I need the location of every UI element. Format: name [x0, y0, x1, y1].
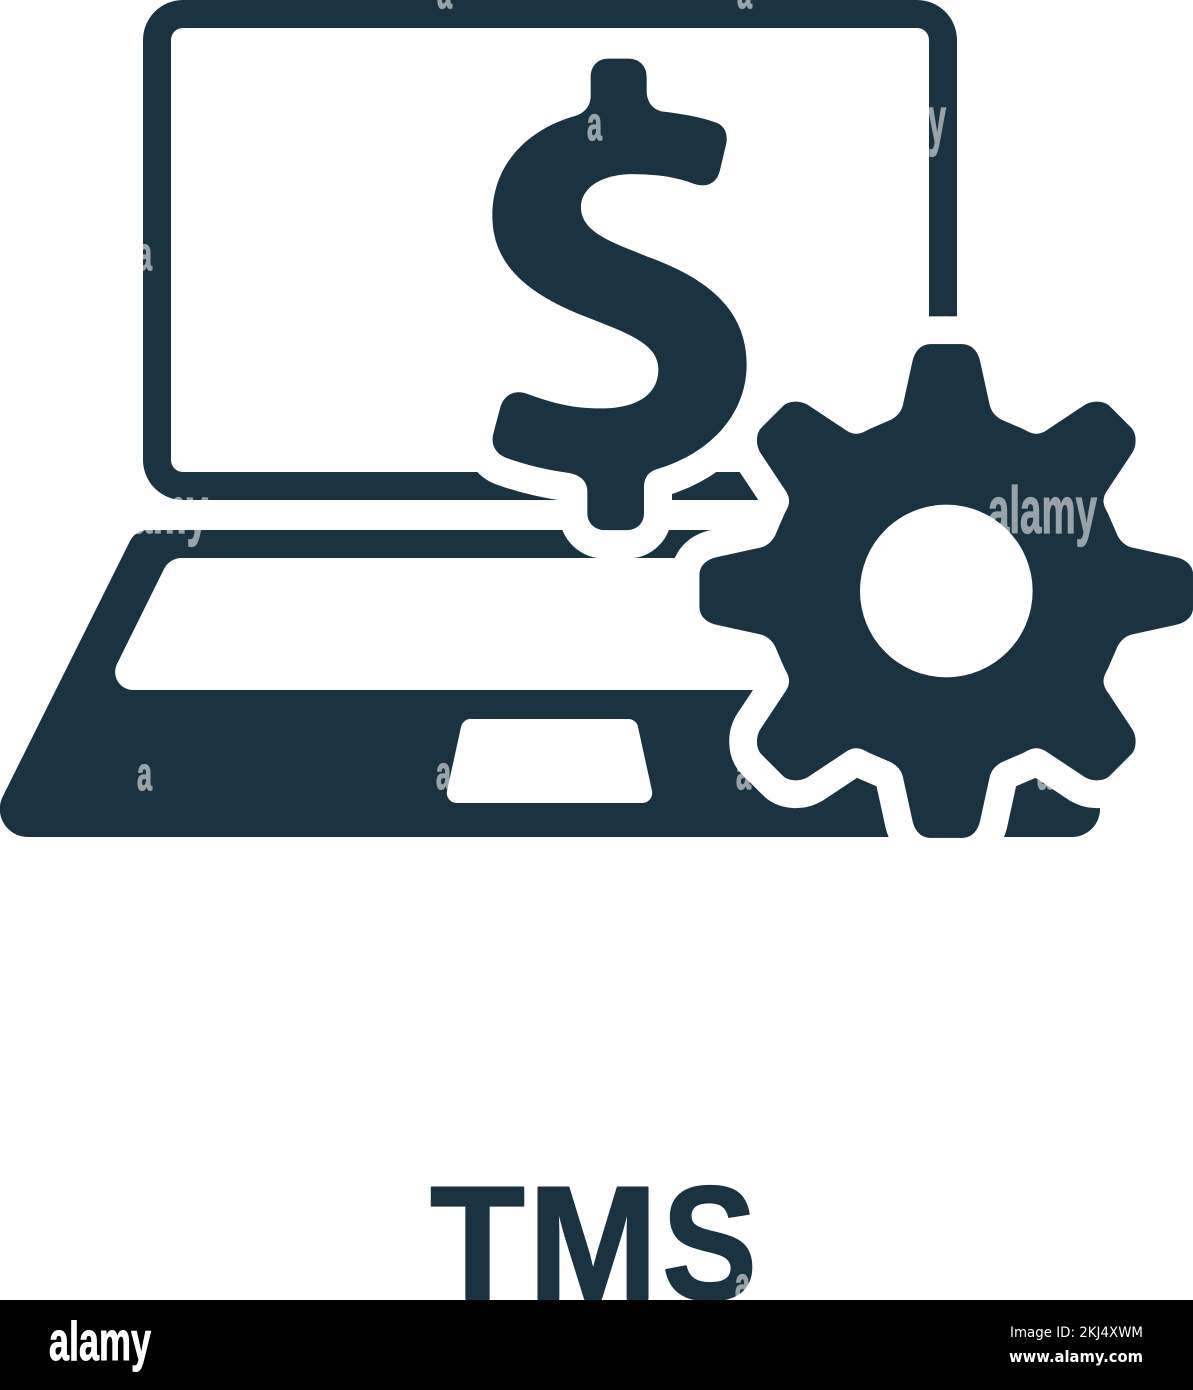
title: TMS [430, 1153, 757, 1334]
title: TMS: T [430, 1153, 525, 1334]
title: TMS: S [662, 1153, 757, 1334]
footer bar [0, 1300, 1193, 1390]
gear outline halo [700, 344, 1193, 838]
footer website: www.alamy.com [1009, 1347, 1143, 1366]
icon: dollar sign [492, 59, 747, 530]
watermark fragments: a [1037, 746, 1052, 799]
watermark fragments: a [587, 97, 602, 150]
watermark fragments: a [735, 1257, 750, 1310]
laptop screen frame [143, 0, 957, 500]
watermark fragments [99, 0, 1097, 1310]
laptop base with keyboard and touchpad cutouts [0, 530, 1100, 837]
icon: laptop [0, 0, 1100, 837]
footer image id: Image ID: 2KJ4XWM [1010, 1325, 1143, 1341]
icon: gear [700, 344, 1193, 838]
watermark fragments: a [137, 747, 152, 800]
footer logo: alamy: alamy [49, 1310, 151, 1372]
watermark fragments: a [736, 746, 751, 799]
watermark fragments: alamy [99, 473, 208, 547]
title: TMS: M [528, 1153, 658, 1334]
watermark fragments: a [436, 746, 451, 799]
watermark fragments: a [137, 227, 152, 280]
watermark fragments: alamy [988, 473, 1097, 547]
watermark fragments: y [928, 83, 946, 157]
